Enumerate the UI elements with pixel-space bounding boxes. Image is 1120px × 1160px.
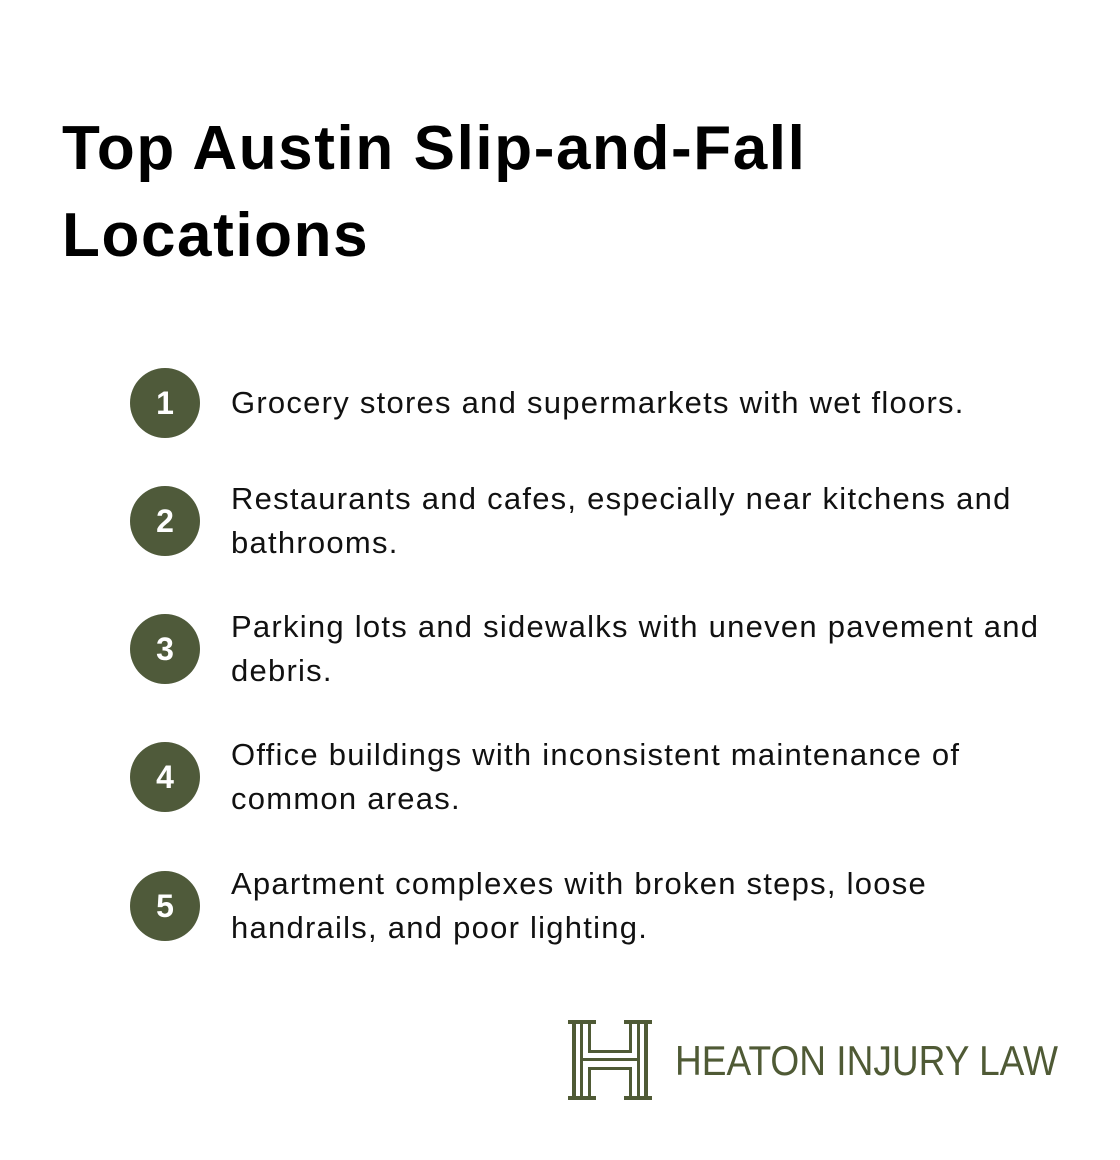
item 3	[130, 609, 1039, 688]
circle 5	[130, 871, 200, 941]
text 4: Office buildings with inconsistent maintenance of	[231, 737, 960, 772]
text 5	[231, 866, 927, 945]
circle 4	[130, 742, 200, 812]
text 4: common areas.	[231, 781, 461, 816]
circle 1: 1	[156, 385, 174, 421]
text 2: Restaurants and cafes, especially near kitchens and	[231, 481, 1012, 516]
item 2	[130, 481, 1012, 560]
text 3: debris.	[231, 653, 333, 688]
item 4	[130, 737, 960, 816]
title	[62, 114, 806, 270]
circle 4: 4	[156, 759, 174, 795]
text 5: handrails, and poor lighting.	[231, 910, 648, 945]
icon: H monogram	[568, 1020, 652, 1100]
text 2	[231, 481, 1012, 560]
item 1	[130, 368, 965, 438]
text 1: Grocery stores and supermarkets with wet floors.	[231, 385, 965, 420]
title: Top Austin Slip-and-Fall	[62, 114, 806, 183]
logo	[568, 1020, 1058, 1100]
item 5	[130, 866, 927, 945]
circle 5: 5	[156, 888, 174, 924]
text 4	[231, 737, 960, 816]
text 5: Apartment complexes with broken steps, loose	[231, 866, 927, 901]
circle 3	[130, 614, 200, 684]
circle 2	[130, 486, 200, 556]
text 2: bathrooms.	[231, 525, 399, 560]
circle 1	[130, 368, 200, 438]
text 3	[231, 609, 1039, 688]
circle 3: 3	[156, 631, 174, 667]
title: Locations	[62, 201, 369, 270]
circle 2: 2	[156, 503, 174, 539]
text 3: Parking lots and sidewalks with uneven pavement and	[231, 609, 1039, 644]
